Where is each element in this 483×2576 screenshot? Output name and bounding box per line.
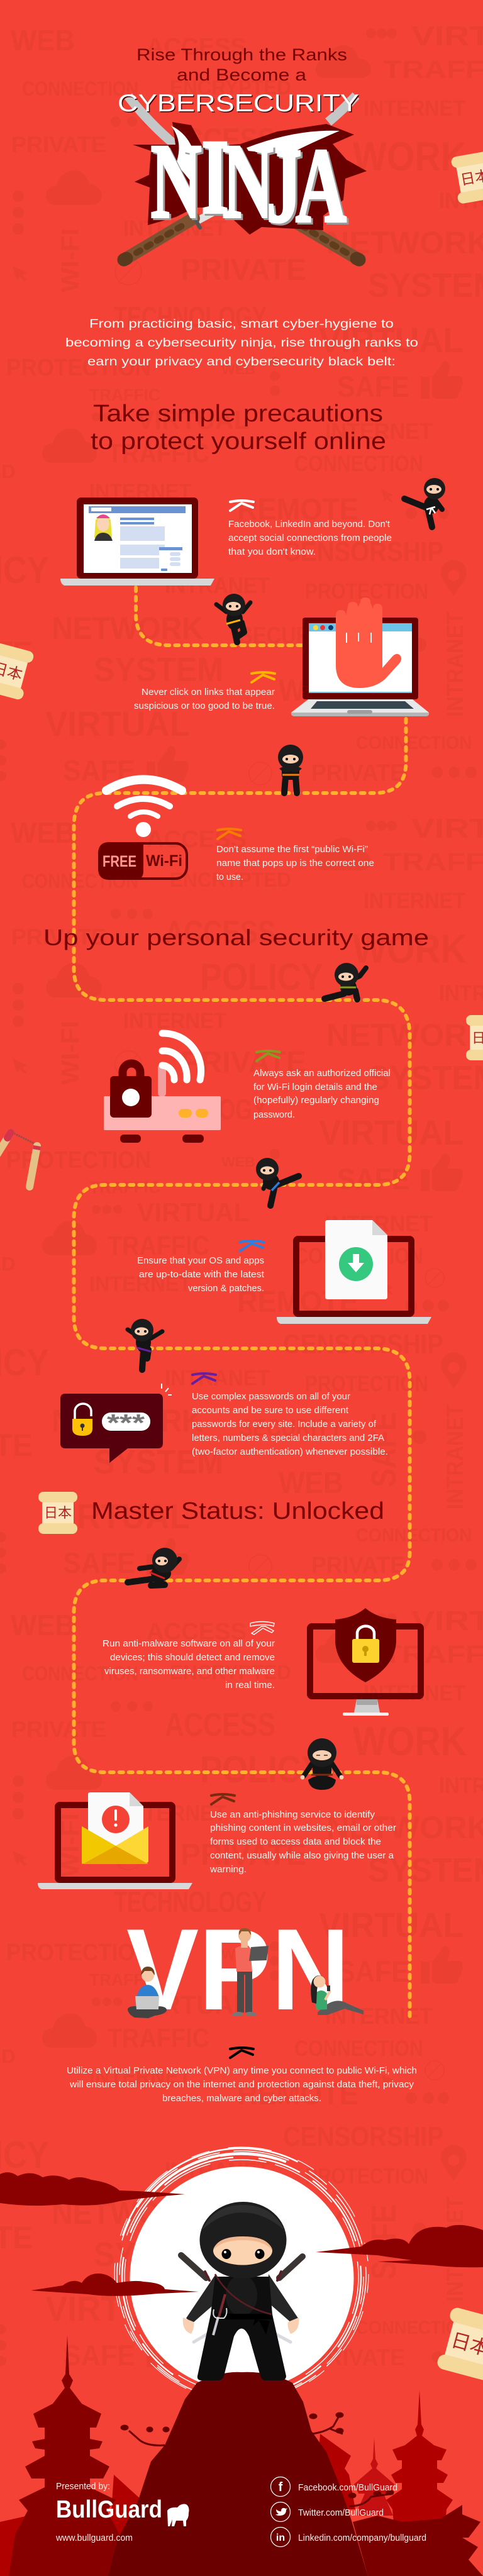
step text: VPN: breaches, malware and cyber attacks. [162,2094,321,2104]
background word pattern: tile 3: CONNECTION [356,2318,472,2338]
background word pattern: tile 3: NETWORK [52,2196,203,2231]
background word pattern: tile 3: WEB [221,1946,255,1962]
background word pattern: tile 1: CENSORSHIP [283,536,443,567]
pagoda silhouette: large left [9,2335,126,2576]
footer: presented by: BullGuard [56,2496,162,2523]
background word pattern: tile 2: VIRTUAL [319,1113,464,1152]
background word pattern: tile 2: TECHNOLOGY [114,1093,267,1126]
VPN illustration with people: VPN [126,1904,350,2034]
background word pattern: tile 2: INTERNET [364,889,465,913]
background word pattern: tile 3: TRAFFIC [108,2023,209,2053]
background word pattern: tile 2: INTRANET [442,1404,468,1509]
step text: anti-malware: devices; this should detect and remove [110,1653,275,1663]
background word pattern: tile 3: WEB [11,1609,75,1641]
background word pattern: tile 1: WI-FI [57,228,84,292]
monitor with shield and lock [310,1608,421,1716]
step text: wi-fi login details: for Wi-Fi login details and the [253,1082,377,1092]
heading: up your personal security game: Up your personal security game [43,924,429,950]
background word pattern: tile 3: VIRTUAL [45,2289,190,2328]
background word pattern: tile 2: ACCESS [147,826,247,853]
background word pattern: tile 3: TECHNOLOGY [114,1885,267,1918]
background word pattern: tile 3: TRAFFIC [89,1970,160,1989]
background word pattern: tile 3: VIRTUAL [319,1905,464,1945]
background word pattern: tile 3: PROTECTION [305,2164,428,2189]
background word pattern: tile 1: SAFE [364,619,403,695]
background word pattern: tile 1: PRIVATE [311,760,405,786]
background word pattern: tile 3: ACCESS [165,1707,275,1743]
background word pattern: tile 3: INTERNET [364,1681,465,1706]
logo: crossed swords and NINJA wordmark [124,96,367,260]
belt: white [230,501,253,511]
background word pattern: tile 3: CENSORSHIP [283,2121,443,2152]
background word pattern: tile 2: REMOTE [237,1285,358,1319]
title: Rise Through the Ranks [136,45,347,64]
swords behind back [181,2255,303,2342]
arms [186,2274,298,2323]
belt: green [257,1051,280,1061]
background word pattern: tile 2: SAFE [337,1162,409,1196]
background word pattern: tile 2: CONNECTION [356,1525,472,1546]
background word pattern: tile 3: POLICY [200,1748,323,1790]
background word pattern: tile 1: VIRTUAL [319,320,464,360]
background word pattern: tile 3: REMOTE [237,2078,358,2111]
background word pattern: tile 1: INTERNET [325,418,433,444]
background word pattern: tile 1: INTERNET [89,480,191,504]
background word pattern: tile 3 [0,1606,483,2372]
scroll decoration: top right [450,150,483,204]
step text: updates [137,1256,264,1294]
torso and legs [197,2277,286,2380]
background word pattern: tile 3: INTERNET [123,1801,226,1826]
step text: public wi-fi: name that pops up is the correct one [216,858,374,869]
background word pattern: tile 2: NETWORK [52,1403,203,1438]
intro text [65,318,418,369]
footer: presented by: Presented by: [56,2481,110,2492]
nunchaku decoration [0,1133,37,1187]
step text: anti-phishing: warning. [209,1865,247,1875]
main black-belt ninja [181,2202,303,2380]
background word pattern: tile 1: PRIVATE [180,253,306,287]
background word pattern: tile 3: SAFE [337,1955,409,1988]
sword hilts [124,208,359,260]
background word pattern: tile 2: INTERNET [123,1009,226,1033]
background word pattern: tile 2: CENSORSHIP [283,1329,443,1360]
background word pattern: tile 1: SAFE [63,754,135,787]
background word pattern: tile 1: PROTECTION [6,355,151,381]
step text: VPN [67,2066,417,2104]
badge: free wi-fi: Wi-Fi [146,852,182,870]
background word pattern: tile 1: POLICY [200,164,323,206]
ninja: jumping, yellow belt [216,594,250,642]
step text: complex passwords: letters, numbers & special characters and 2FA [192,1433,384,1443]
icon: router with lock and signal [104,1033,221,1143]
background word pattern: tile 1: WEB [221,362,255,377]
clouds [0,2172,483,2296]
step text: complex passwords: (two-factor authentication) whenever possible. [192,1447,388,1457]
facebook link: f [279,2480,283,2494]
heading: take simple precautions: to protect yourself online [91,428,386,455]
background word pattern: tile 1: CONNECTION [22,77,138,100]
background word pattern: tile 2: CONNECTION [22,870,138,892]
laptop: phishing warning envelope [38,1792,192,1889]
sai weapon [213,2294,226,2335]
background word pattern: tile 1: VIRTUAL [137,405,250,435]
scroll decoration: bottom right [436,2306,483,2382]
background word pattern: tile 1: CONNECTION [356,733,472,753]
background word pattern: tile 1: TRAFFIC [89,386,160,404]
ninja: side kick, blue belt [256,1158,299,1206]
step text: social connections: accept social connections from people [228,533,392,543]
background word pattern: tile 1: SYSTEM [94,651,223,689]
footer: presented by: www.bullguard.com [55,2533,133,2543]
ninja: jumping, purple belt [128,1319,162,1370]
facebook link: Facebook.com/BullGuard [298,2482,397,2493]
footer: social links [270,2477,426,2547]
background word pattern: tile 2: WEB [279,1467,343,1500]
step text: anti-malware: viruses, ransomware, and other malware [104,1667,275,1677]
background word pattern: tile 1: SECURITY [239,623,343,649]
person with laptop [128,1967,167,2018]
ninja: flying kick, red belt [128,1548,179,1585]
background word pattern: tile 2: ENCRYPTED [170,869,291,891]
belt: orange [218,829,241,839]
background word pattern: tile 1: TECHNOLOGY [114,301,267,333]
background word pattern: tile 3: INTERNET [89,2065,191,2089]
stop hand [336,597,401,688]
background word pattern: tile 2: POLICY [200,956,323,998]
laptop: stop hand warning [291,597,429,716]
step text: public wi-fi: to use. [216,872,243,882]
title: cybersecurity: CYBERSECURITY [118,91,360,118]
step text: wi-fi login details: (hopefully) regularly changing [253,1096,379,1106]
facebook link [270,2477,397,2497]
background word pattern: tile 3: PRIVATE [11,1716,106,1742]
envelope [82,1826,148,1864]
background word pattern: tile 3: CONNECTION [294,2036,423,2061]
background word pattern: tile 2: PROTECTION [6,1147,151,1174]
background word pattern: tile 1: NETWORK [52,611,203,646]
step text: anti-phishing: forms used to access data and block the [210,1837,381,1847]
background word pattern: tile 2: INTERNET [89,1272,191,1296]
background word pattern: tile 3: INTRANET [165,2158,270,2183]
ninja: high kick, white belt [404,478,445,527]
background word pattern: tile 2: PRIVATE [311,1552,405,1578]
background word pattern: tile 3: PROTECTION [6,1940,151,1966]
twitter link [270,2502,384,2522]
person with tablet [233,1928,269,2016]
person with phone [311,1975,364,2015]
step text: anti-malware [103,1639,275,1690]
step text: complex passwords: Use complex passwords on all of your [192,1392,350,1402]
background word pattern: tile 1: CONNECTION [294,452,423,476]
background word pattern: tile 2: SYSTEM [94,1443,223,1481]
step text: suspicious links: suspicious or too good to be true. [134,701,275,711]
linkedin link [270,2527,426,2547]
background word pattern: tile 3: WORK [353,1718,467,1764]
wordmark: NINJA [153,120,348,247]
background word pattern: tile 3: ENCRYPTED [170,1661,291,1684]
sword blades [128,96,356,151]
step text: wi-fi login details: password. [253,1110,295,1120]
linkedin link: Linkedin.com/company/bullguard [298,2533,426,2543]
step text: anti-phishing [209,1810,396,1875]
step text: public wi-fi: Don't assume the first “public Wi-Fi” [216,845,368,855]
scroll icon beside heading: 日本 [44,1505,72,1521]
background word pattern: tile 3: PRIVATE [311,2345,405,2370]
belt: brown [211,1794,235,1804]
background word pattern: tile 3: INTRANET [442,2197,468,2302]
background word pattern: tile 2: SAFE [63,1546,135,1579]
background word pattern: tile 1: ACCESS [147,34,247,60]
background word pattern: tile 2: SECURITY [239,1415,343,1441]
background word pattern: tile 2: PROTECTION [305,1372,428,1396]
background word pattern: tile 2: WEB [221,1154,255,1170]
background word pattern: tile 3: SECURITY [239,2207,343,2234]
laptop: social network profile [60,497,214,586]
background word pattern: tile 2: SAFE [364,1412,403,1487]
profile avatar [94,514,113,541]
intro text: From practicing basic, smart cyber-hygiene to [89,318,394,331]
background word pattern: tile 1: PRIVATE [11,131,106,157]
step text: anti-phishing: Use an anti-phishing service to identify [210,1810,375,1820]
step text: updates: Ensure that your OS and apps [137,1256,264,1266]
background word pattern: tile 2: INTERNET [325,1211,433,1236]
background word pattern: tile 2: PRIVATE [180,1046,306,1079]
background word pattern: tile 1: WEB [11,24,75,57]
icon: bulldog [167,2504,189,2526]
step text: suspicious links [134,687,275,711]
pagoda silhouette: dark lower right [353,2505,483,2576]
speech bubble: password with padlock [60,1384,172,1463]
step text: public wi-fi [216,845,374,882]
step text: social connections [228,519,392,557]
ninja: meditating, brown belt [301,1738,343,1790]
background word pattern: tile 1: INTRANET [442,612,468,717]
background word pattern: tile 3: PRIVATE [180,1838,306,1872]
scroll icon beside heading [38,1492,77,1534]
step text: suspicious links: Never click on links that appear [142,687,275,697]
footer: presented by [55,2481,189,2543]
badge: free wi-fi: FREE [103,853,136,870]
step text: wi-fi login details [253,1069,391,1120]
background word pattern: tile 1: INTRANET [165,574,270,598]
background word pattern: tile 3: SAFE [364,2204,403,2280]
background word pattern: tile 2: VIRTUAL [45,1496,190,1536]
background word pattern: tile 3: CONNECTION [22,1662,138,1685]
mountain [108,2372,368,2576]
bonsai trees on mountain [121,2413,393,2506]
background word pattern: tile 3: WI-FI [57,1813,84,1877]
background word pattern: tile 2: PRIVATE [11,924,106,950]
step text: VPN: Utilize a Virtual Private Network (VPN) any time you connect to public Wi-Fi, which [67,2066,417,2076]
background word pattern: tile 2: WORK [353,926,467,972]
speech bubble: password with padlock: *** [107,1410,145,1436]
pagoda silhouettes: back layer [0,2390,453,2576]
heading: take simple precautions [91,401,386,455]
background word pattern: tile 2: TRAFFIC [89,1178,160,1197]
logo: crossed swords and NINJA wordmark: NINJA [151,118,347,245]
step text: social connections: that you don't know. [228,547,316,557]
step text: VPN: will ensure total privacy on the internet and protection against data theft, privacy [69,2080,414,2090]
step text: anti-phishing: content, usually while also giving the user a [210,1851,394,1861]
head [200,2202,287,2279]
background word pattern: tile 1: PROTECTION [305,579,428,604]
ninja: low stance, green belt [325,963,366,999]
background word pattern: tile 3: WEB [279,2259,343,2292]
background word pattern: tile 2: CONNECTION [294,1244,423,1269]
belt: black [230,2048,253,2058]
dashed path connecting the steps [74,587,410,2016]
background word pattern: tile 1: TRAFFIC [108,438,209,469]
background word pattern: tile 1: WORK [353,133,467,179]
belt: yellow [252,672,275,682]
badge: free wi-fi [98,842,187,880]
background word pattern: tile 1: WEB [279,674,343,708]
scroll decoration: right edge [466,1015,483,1060]
step text: anti-malware: Run anti-malware software on all of your [103,1639,275,1649]
step text: complex passwords: passwords for every site. Include a variety of [192,1419,377,1430]
belt: blue [240,1241,264,1251]
step text: complex passwords [192,1392,388,1457]
step text: wi-fi login details: Always ask an authorized official [253,1069,391,1079]
background word pattern: tile 1: INTERNET [364,96,465,121]
background word pattern: tile 1 [0,21,483,787]
background word pattern: tile 1: VIRTUAL [45,704,190,743]
background word pattern: tile 1: ENCRYPTED [170,76,291,99]
background word pattern: tile 3: INTERNET [325,2003,433,2029]
title: cybersecurity: CYBERSECURITY [118,90,359,117]
background word pattern: tile 1: ACCESS [165,122,275,158]
heading: master status unlocked: Master Status: Unlocked [91,1498,384,1524]
scroll decoration: left edge [0,641,35,701]
intro text: becoming a cybersecurity ninja, rise through ranks to [65,336,418,350]
logo dark backing [133,122,367,235]
laptop: download document [277,1220,431,1324]
title: and Become a [177,65,307,84]
step text: complex passwords: accounts and be sure to use different [192,1406,348,1416]
background word pattern: tile 3: VIRTUAL [137,1990,250,2019]
step text: updates: are up-to-date with the latest [139,1270,264,1280]
moon with brush ring [72,2103,411,2444]
background word pattern: tile 2: WI-FI [57,1021,84,1085]
belt: purple [192,1374,216,1384]
background word pattern: tile 2 [0,813,483,1579]
background word pattern: tile 1: SAFE [337,370,409,403]
background word pattern: tile 2: INTRANET [165,1366,270,1391]
background word pattern: tile 3: SAFE [63,2339,135,2372]
step text: anti-malware: in real time. [225,1680,275,1690]
shield [335,1608,396,1682]
background word pattern: tile 3: SYSTEM [94,2236,223,2273]
step text: updates: version & patches. [188,1284,264,1294]
background word pattern: tile 2: WEB [11,816,75,849]
heading: take simple precautions: Take simple precautions [93,401,383,427]
step text: anti-phishing: phishing content in websites, email or other [210,1823,396,1833]
background word pattern: tile 1: INTERNET [123,216,226,241]
wordmark flourishes [171,126,340,189]
background word pattern: tile 2: TRAFFIC [108,1231,209,1261]
ninja: standing, orange belt [278,745,303,793]
intro text: earn your privacy and cybersecurity black belt: [87,355,396,369]
linkedin link: in [276,2533,285,2543]
background word pattern: tile 1: REMOTE [237,493,358,526]
title [136,45,347,84]
background word pattern: tile 2: VIRTUAL [137,1197,250,1227]
background word pattern: tile 3: ACCESS [147,1619,247,1645]
step text: social connections: Facebook, LinkedIn and beyond. Don't [228,519,390,530]
background word pattern: tile 2: ACCESS [165,914,275,951]
belt: white outline [250,1621,274,1635]
icon: wifi signal [106,780,182,837]
twitter link: Twitter.com/BullGuard [298,2507,384,2518]
